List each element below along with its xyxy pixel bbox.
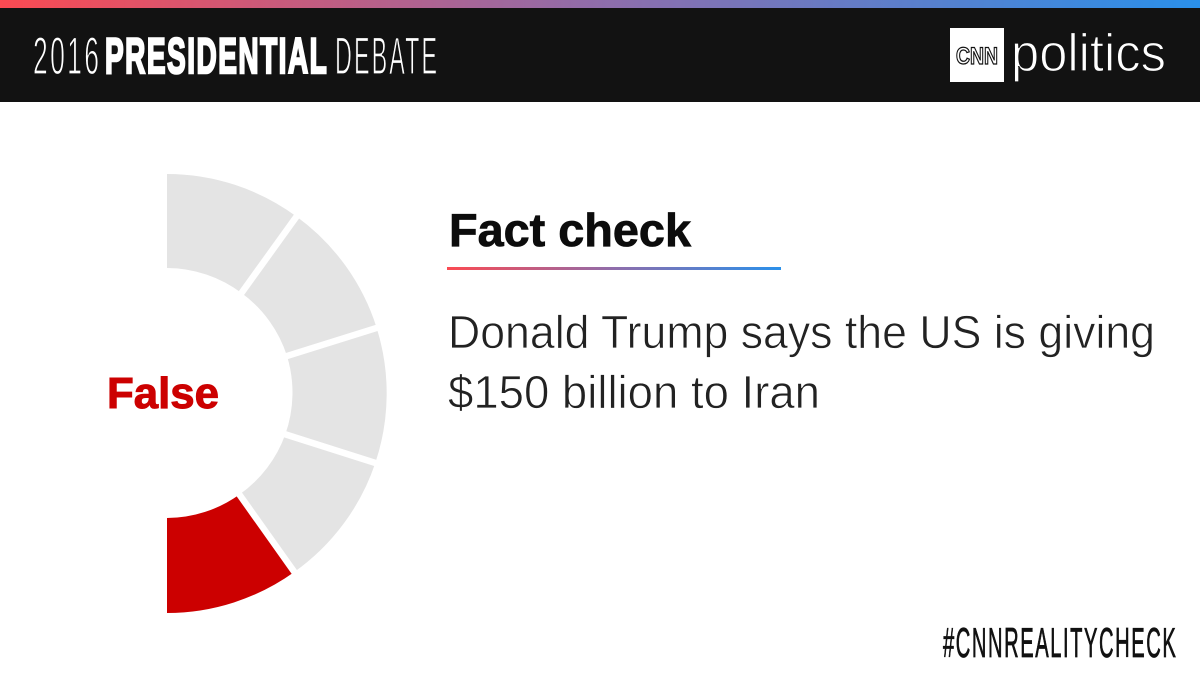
header title: DEBATE [335,26,437,86]
claim text: $150 billion to Iran [448,366,820,418]
heading underline [447,267,781,270]
gauge label: False: False [107,369,219,418]
CNN politics logo [950,24,1166,83]
heading: Fact check: Fact check [449,204,691,256]
header title: 2016 [33,26,99,85]
hashtag: #CNNREALITYCHECK [943,619,1176,666]
top gradient bar [0,0,1200,8]
gauge: red false segment [167,494,294,613]
CNN politics logo: politics [1011,24,1166,83]
header title: PRESIDENTIAL [105,27,327,84]
gauge: five-segment half ring [167,174,387,613]
claim text [448,306,1155,418]
header title [33,26,437,86]
header band [0,8,1200,102]
claim text: Donald Trump says the US is giving [448,306,1155,358]
CNN politics logo: CNN [956,43,998,70]
